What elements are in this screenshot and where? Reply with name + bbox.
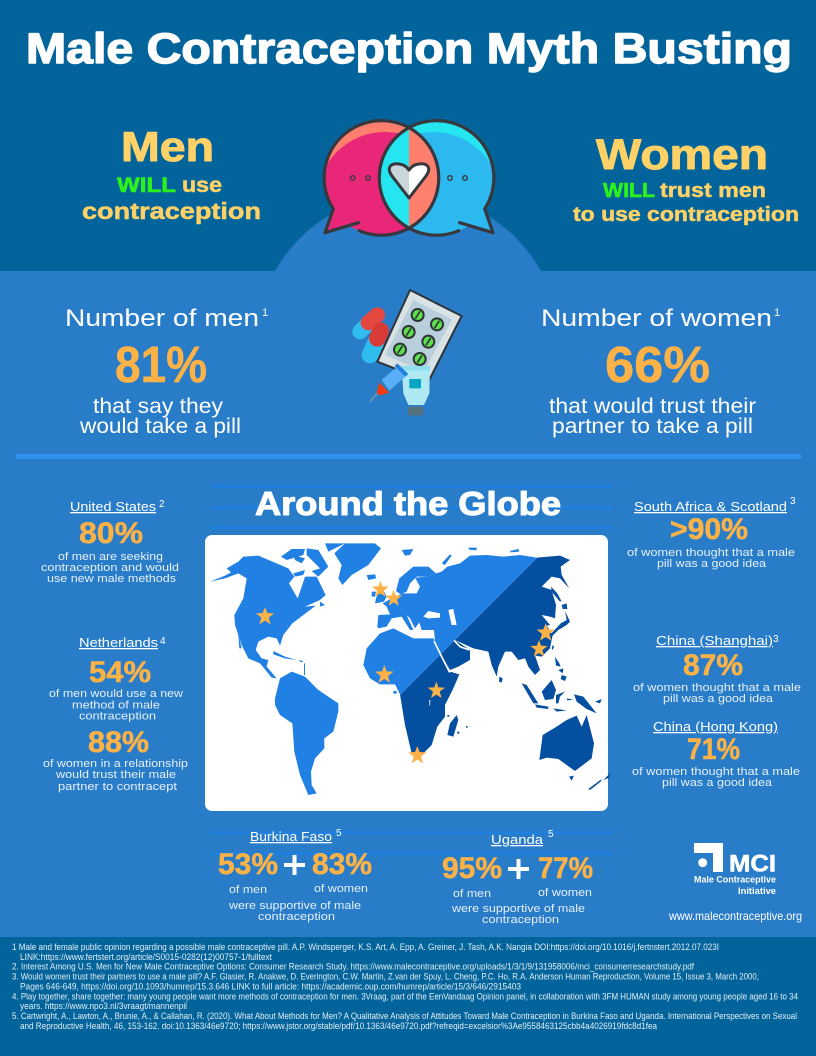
stat: burkina faso: 83% bbox=[312, 848, 372, 881]
stat: uganda: 77% bbox=[538, 852, 593, 885]
stat: netherlands: of women in a relationship bbox=[43, 758, 188, 770]
logo: male contraceptive initiative: Initiative bbox=[738, 886, 776, 897]
stat: men 81%: 81% bbox=[115, 336, 207, 393]
stat: women 66%: partner to take a pill bbox=[552, 415, 753, 438]
stat: women 66%: 1 bbox=[774, 307, 780, 319]
world map bbox=[210, 543, 610, 795]
stat: burkina faso: of women bbox=[314, 883, 368, 895]
logo: male contraceptive initiative: MCI bbox=[729, 850, 776, 878]
stat: south africa and scotland: of women thought that a male bbox=[627, 547, 795, 559]
header background bbox=[0, 0, 816, 271]
stat: burkina faso: 5 bbox=[336, 828, 342, 839]
stat: china shanghai: 87% bbox=[683, 649, 743, 682]
stat: burkina faso: 53% bbox=[218, 848, 278, 881]
stat: women 66%: that would trust their bbox=[549, 395, 756, 418]
logo: male contraceptive initiative bbox=[694, 843, 776, 897]
stat: china shanghai bbox=[633, 633, 801, 705]
stat: south africa and scotland: 3 bbox=[790, 496, 796, 507]
stat: china hong kong: 71% bbox=[687, 733, 740, 766]
stat: women 66% bbox=[541, 305, 780, 438]
icon: overlapping speech bubbles with heart bbox=[322, 119, 496, 237]
stat: united states: 2 bbox=[159, 499, 165, 510]
stat: netherlands: 4 bbox=[160, 636, 166, 647]
heading: men bbox=[82, 123, 261, 224]
stat: women 66%: 66% bbox=[605, 336, 710, 393]
stat: uganda: 95% bbox=[442, 852, 502, 885]
heading: women: to use contraception bbox=[573, 204, 799, 226]
footnotes: Pages 646-649, https://doi.org/10.1093/humrep/15.3.646 LINK to full article: https://academic.oup.com/humrep/article/15/3/646/2915403 bbox=[20, 982, 521, 992]
stat: china shanghai: of women thought that a male bbox=[633, 682, 801, 694]
stat: united states: United States bbox=[70, 499, 157, 514]
heading: women: WILL bbox=[603, 180, 655, 202]
stat: china shanghai: pill was a good idea bbox=[663, 693, 774, 705]
stat: uganda: contraception bbox=[482, 914, 559, 926]
footnotes: 1 Male and female public opinion regarding a possible male contraceptive pill. A.P. Windsperger, K.S. Art, A. Epp, A. Greiner, J. Tash, A.K. Nangia DOI:https://doi.org/10.1016/j.fertnstert.2012.07.023I bbox=[12, 942, 719, 952]
stat: china hong kong: pill was a good idea bbox=[662, 777, 773, 789]
stat: uganda: were supportive of male bbox=[451, 903, 585, 915]
logo: male contraceptive initiative: Male Contraceptive bbox=[694, 874, 776, 886]
title: Male Contraception Myth Busting bbox=[26, 25, 792, 73]
heading: men: WILL bbox=[117, 174, 176, 197]
stat: men 81%: would take a pill bbox=[79, 415, 241, 438]
heading: men: contraception bbox=[82, 198, 261, 224]
stat: men 81%: that say they bbox=[93, 395, 224, 418]
stat: women 66%: Number of women bbox=[541, 305, 772, 332]
blue body panel bbox=[0, 271, 816, 937]
stat: south africa and scotland: >90% bbox=[670, 513, 748, 546]
stat: men 81% bbox=[65, 305, 268, 438]
stat: china shanghai: China (Shanghai) bbox=[656, 633, 773, 648]
heading: women: Women bbox=[596, 131, 768, 179]
stat: uganda: 5 bbox=[548, 829, 554, 840]
footer background bbox=[0, 937, 816, 1056]
stat: united states: contraception and would bbox=[41, 562, 179, 574]
stat: netherlands: 88% bbox=[88, 726, 149, 759]
footnotes: LINK:https://www.fertstert.org/article/S0015-0282(12)00757-1/fulltext bbox=[20, 952, 272, 962]
stat: south africa and scotland: South Africa & Scotland bbox=[634, 499, 787, 514]
decorative stripes bbox=[210, 485, 612, 855]
stat: united states: use new male methods bbox=[47, 573, 177, 585]
stat: netherlands: method of male bbox=[72, 700, 160, 712]
stat: burkina faso: were supportive of male bbox=[228, 900, 361, 912]
footnotes: and Reproductive Health, 46, 153-162. doi:10.1363/46e9720; https://www.jstor.org/stable/pdf/10.1363/46e9720.pdf?refreqid=excelsior%3Ae9558463125cbb4a4026919fdc8d1fea bbox=[20, 1021, 657, 1031]
website url: www.malecontraceptive.org bbox=[668, 909, 802, 923]
stat: netherlands: Netherlands bbox=[79, 635, 159, 650]
stat: united states: 80% bbox=[79, 517, 143, 550]
stat: united states: of men are seeking bbox=[58, 551, 163, 563]
stat: netherlands: would trust their male bbox=[55, 769, 176, 781]
stat: south africa and scotland: pill was a good idea bbox=[657, 558, 767, 570]
stat: netherlands: of men would use a new bbox=[49, 688, 183, 700]
stat: uganda: of women bbox=[538, 887, 592, 899]
footnotes: years. https://www.npo3.nl/3vraagt/mannenpil bbox=[20, 1001, 187, 1011]
heading: men: Men bbox=[121, 123, 214, 170]
stat: netherlands: partner to contracept bbox=[58, 781, 177, 793]
stat: burkina faso: contraception bbox=[258, 911, 335, 923]
heading: women: trust men bbox=[660, 180, 766, 202]
stat: china hong kong: of women thought that a male bbox=[632, 766, 800, 778]
stat: china shanghai: 3 bbox=[773, 634, 779, 645]
stat: netherlands: contraception bbox=[79, 710, 156, 722]
inland seas bbox=[423, 609, 469, 706]
stat: china hong kong bbox=[632, 719, 800, 789]
stat: men 81%: Number of men bbox=[65, 305, 259, 332]
heading: around the globe: Around the Globe bbox=[255, 485, 561, 522]
stat: burkina faso: of men bbox=[229, 884, 267, 896]
stars on study locations bbox=[256, 581, 555, 763]
panel: world map card bbox=[205, 535, 608, 811]
stat: south africa and scotland bbox=[627, 496, 796, 570]
icon: pills, blister pack, syringe and tube bbox=[360, 290, 462, 415]
stat: netherlands bbox=[43, 635, 188, 793]
stat: uganda: Uganda bbox=[491, 832, 544, 847]
stat: uganda bbox=[442, 829, 593, 926]
stat: burkina faso: Burkina Faso bbox=[250, 829, 332, 844]
stat: united states bbox=[41, 499, 179, 585]
horizontal divider bbox=[16, 454, 801, 459]
heading: men: use bbox=[182, 174, 222, 197]
dome behind bubbles bbox=[275, 193, 541, 271]
stat: men 81%: 1 bbox=[262, 307, 268, 319]
heading: women bbox=[573, 131, 799, 226]
stat: china hong kong: China (Hong Kong) bbox=[653, 719, 778, 734]
footnotes: 2. Interest Among U.S. Men for New Male Contraceptive Options: Consumer Research Study. https://www.malecontraceptive.org/uploads/1/3/1/9/131958006/mci_consumerresearchstudy.pdf bbox=[12, 962, 694, 972]
stat: netherlands: 54% bbox=[89, 656, 151, 689]
stat: uganda: of men bbox=[453, 888, 491, 900]
footnotes bbox=[12, 942, 798, 1031]
stat: burkina faso bbox=[218, 828, 372, 923]
